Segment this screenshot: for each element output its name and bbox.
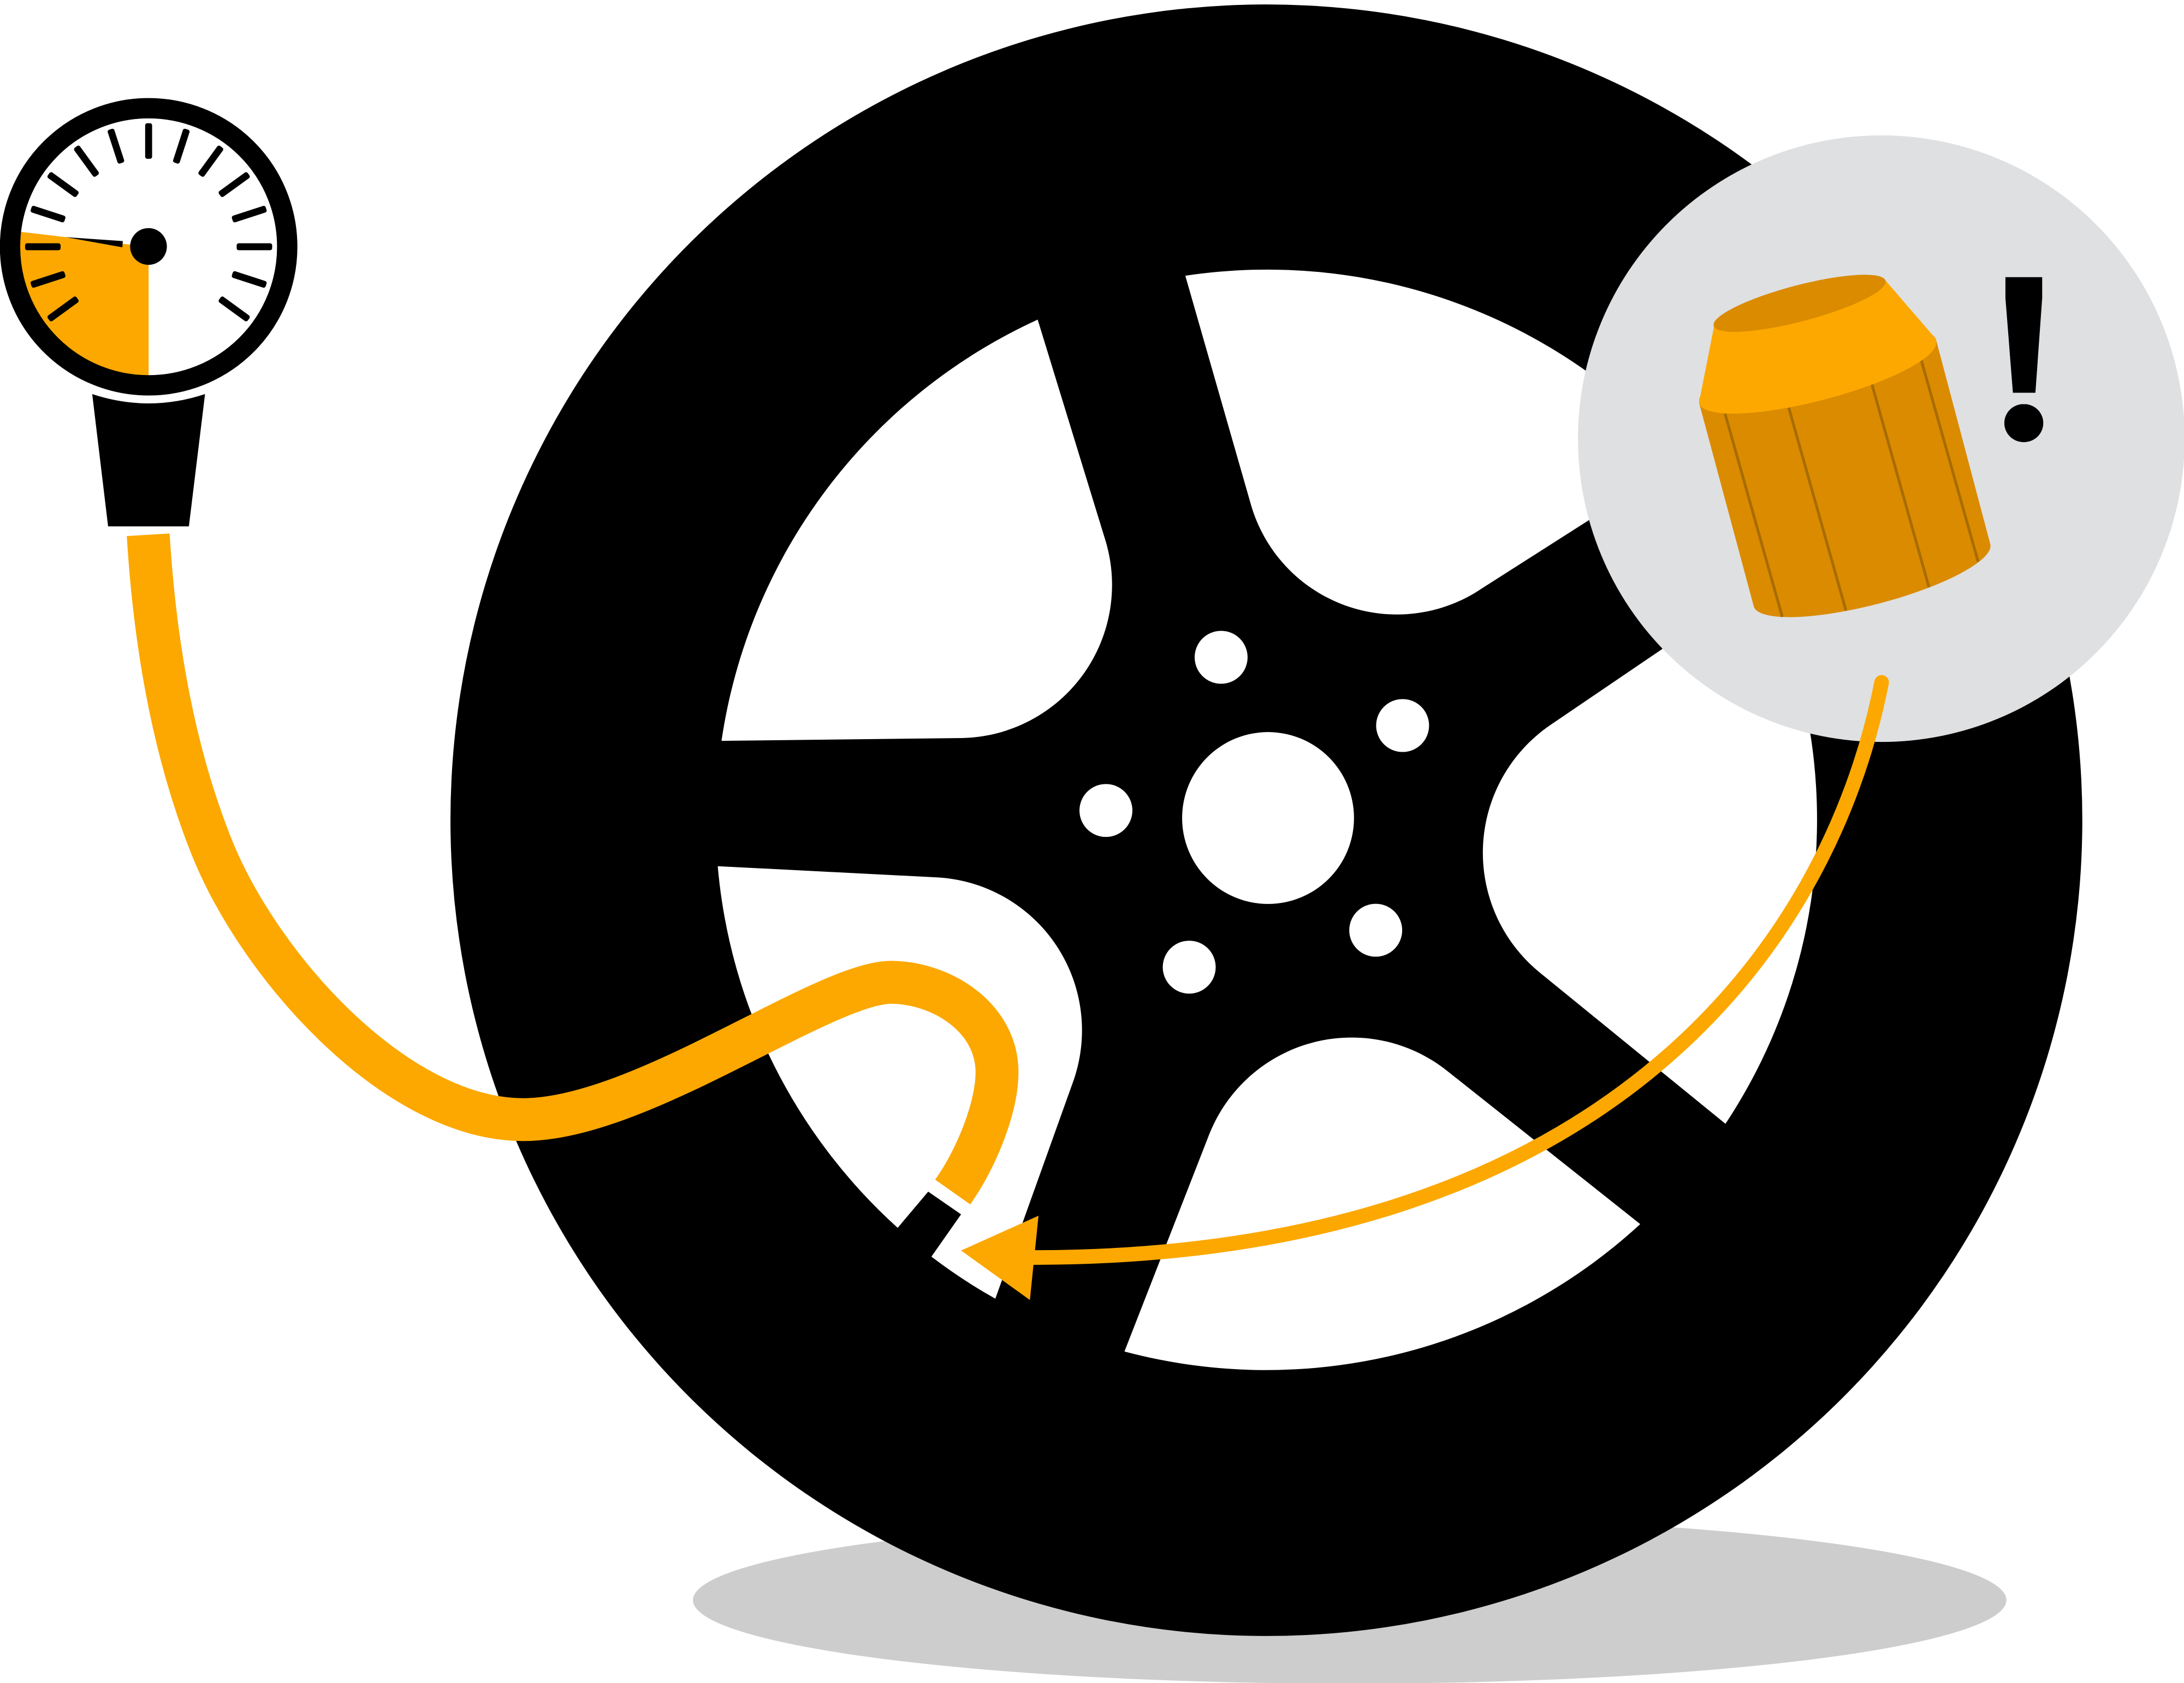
gauge stem <box>92 394 205 526</box>
tire body <box>450 4 2082 1636</box>
needle hub <box>130 228 167 265</box>
gauge needle <box>66 237 123 247</box>
arrow from valve cap to valve stem <box>961 682 1882 1300</box>
orange hose <box>148 535 997 1192</box>
exclamation mark: ! <box>1986 234 2062 491</box>
callout circle: missing valve cap <box>1578 135 2184 742</box>
icon: valve cap <box>1699 263 1991 617</box>
pressure gauge <box>10 108 287 526</box>
wheel window: upper right <box>1185 270 1684 615</box>
lug holes <box>1079 631 1429 994</box>
cap body <box>1699 340 1991 617</box>
cap upper band <box>1699 280 1936 414</box>
cap ridges <box>1725 360 1978 617</box>
gauge face <box>20 118 277 375</box>
wheel window: lower left with valve stem notch <box>718 866 1082 1299</box>
arrow shaft <box>1034 682 1882 1258</box>
gauge ring <box>10 108 287 385</box>
wheel window: upper left <box>721 319 1112 741</box>
arrow head <box>961 1216 1038 1300</box>
tire and wheel <box>450 4 2082 1636</box>
cap top <box>1709 263 1890 343</box>
center bore <box>1182 732 1354 904</box>
wheel window: bottom <box>1124 1038 1640 1370</box>
ground shadow <box>693 1517 2007 1683</box>
low pressure sector <box>20 232 149 375</box>
gauge tick marks <box>25 123 272 322</box>
wheel window: right <box>1483 581 1817 1124</box>
